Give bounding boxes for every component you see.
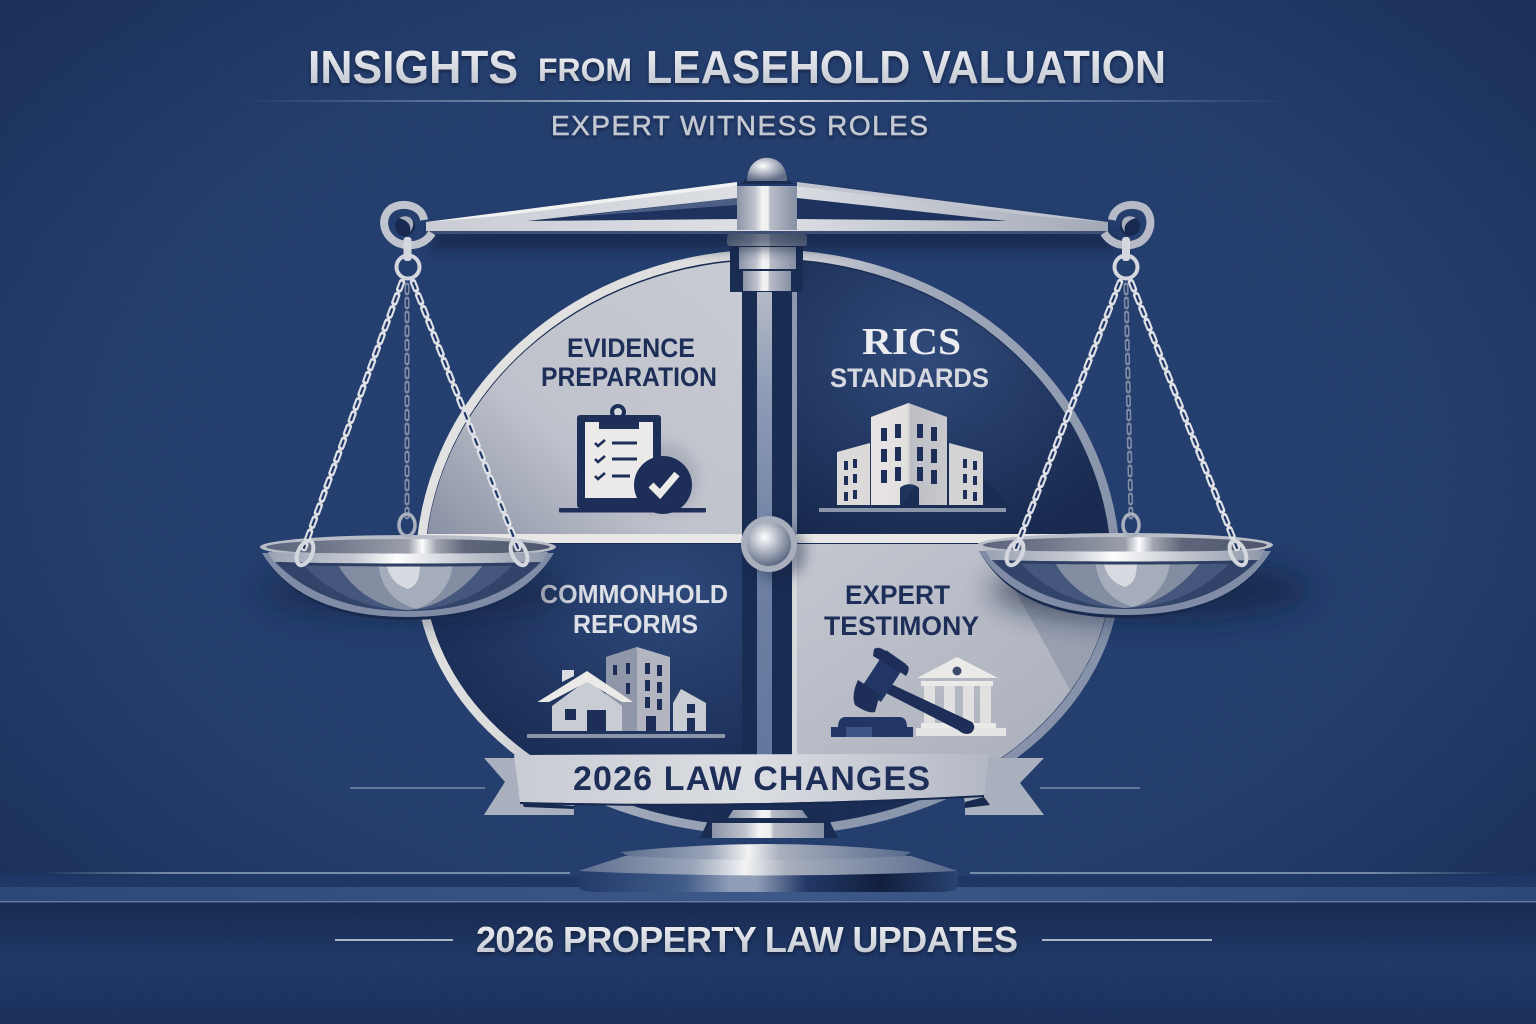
label: expert testimony: TESTIMONY — [824, 611, 979, 641]
label: commonhold reforms — [540, 579, 728, 639]
left scroll — [384, 205, 432, 245]
ribbon body — [514, 754, 989, 804]
icon: house and apartments — [527, 647, 725, 738]
label: commonhold reforms: REFORMS — [573, 609, 698, 639]
courthouse — [916, 657, 1006, 736]
banner text: 2026 LAW CHANGES — [573, 760, 930, 798]
chain rings — [293, 237, 531, 568]
decorative side lines — [40, 787, 1500, 874]
label: evidence preparation: EVIDENCE — [567, 333, 695, 363]
gavel — [884, 684, 974, 734]
banner — [484, 754, 1044, 815]
title: INSIGHTS — [308, 41, 518, 93]
label: RICS standards: STANDARDS — [830, 363, 989, 393]
footer line right — [1042, 939, 1212, 941]
scale beam — [384, 158, 1150, 250]
chains — [1016, 282, 1237, 548]
central column — [727, 234, 807, 805]
label: RICS standards: RICS — [862, 321, 961, 363]
panel: expert testimony quadrant — [797, 544, 1105, 758]
title: LEASEHOLD VALUATION — [646, 41, 1166, 93]
footer text: 2026 PROPERTY LAW UPDATES — [476, 919, 1018, 960]
icon: clipboard with check — [559, 404, 706, 514]
subtitle: EXPERT WITNESS ROLES — [551, 110, 928, 141]
pan — [260, 535, 556, 620]
left tail — [484, 758, 574, 815]
label: evidence preparation: PREPARATION — [541, 362, 717, 392]
quadrant divider — [424, 534, 1112, 543]
label: expert testimony — [824, 580, 979, 641]
title rule — [238, 100, 1292, 102]
central ball — [741, 516, 806, 580]
chain rings — [1003, 237, 1250, 568]
sound block — [831, 717, 913, 737]
column base — [578, 810, 958, 892]
right tail — [960, 758, 1044, 815]
label: commonhold reforms: COMMONHOLD — [540, 579, 728, 609]
left scale pan and chains — [260, 237, 570, 622]
label: evidence preparation — [541, 333, 717, 392]
footer line left — [335, 939, 453, 941]
chains — [304, 282, 518, 548]
title — [308, 41, 1166, 93]
panel: quadrant circle — [415, 254, 1125, 831]
panel: commonhold reforms quadrant — [473, 544, 742, 744]
pan — [977, 533, 1273, 618]
label: expert testimony: EXPERT — [845, 580, 950, 610]
panel: RICS standards quadrant — [797, 263, 1064, 488]
icon: office buildings — [819, 403, 1010, 512]
icon: gavel and courthouse — [831, 648, 1006, 737]
panel: evidence preparation quadrant — [415, 255, 745, 538]
label: RICS standards — [830, 321, 989, 393]
title: FROM — [538, 52, 632, 88]
right scale pan and chains — [977, 237, 1310, 622]
top dome — [740, 158, 794, 184]
right scroll — [1104, 205, 1150, 245]
